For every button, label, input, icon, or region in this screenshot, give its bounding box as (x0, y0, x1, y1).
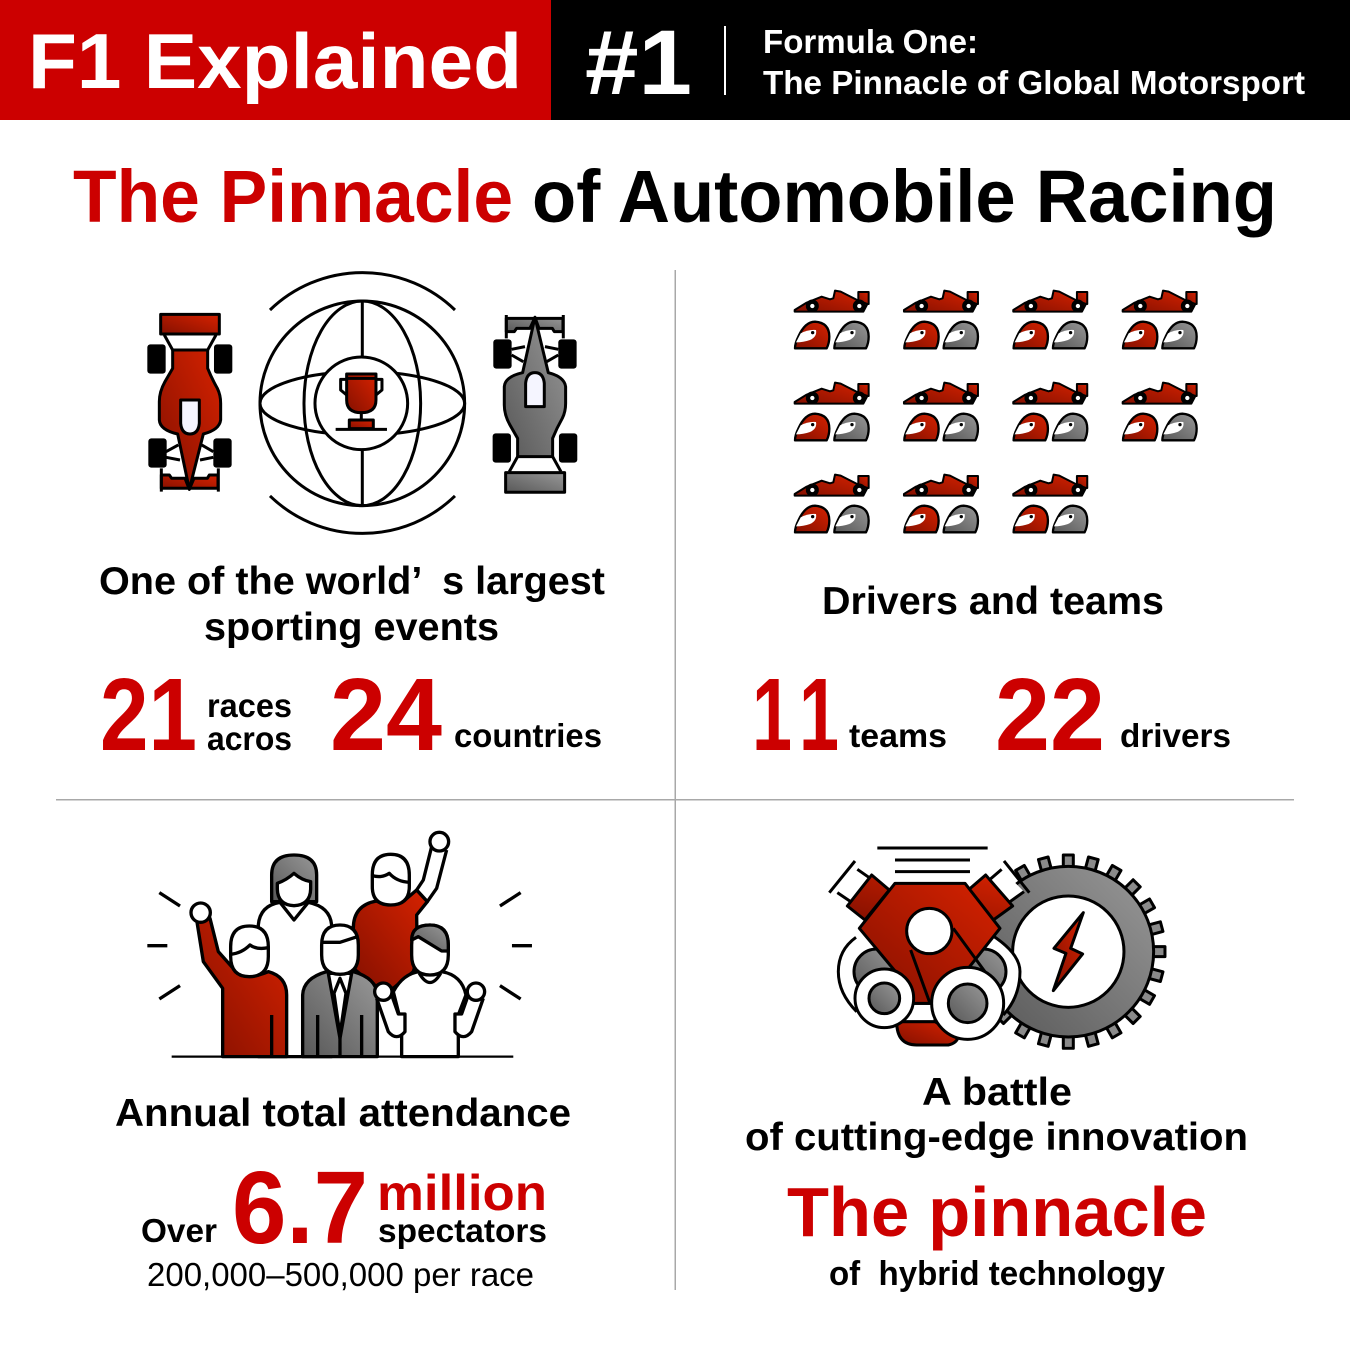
heading: annual total attendance: Annual total attendance (115, 1092, 571, 1135)
panel: drivers and teams (752, 291, 1231, 772)
stat: over 6.7 million spectators: spectators (378, 1212, 547, 1249)
stat: over 6.7 million spectators (141, 1150, 547, 1265)
icon: grey car top view (493, 315, 577, 492)
main title: The Pinnacle (73, 155, 513, 238)
heading: world's largest sporting events: sporting events (204, 606, 499, 649)
callout: of hybrid technology: of hybrid technology (829, 1255, 1165, 1293)
stat: 11 teams: 1 (752, 657, 792, 772)
stat: over 6.7 million spectators: 6.7 (232, 1150, 368, 1265)
stat: 24 countries: countries (454, 717, 602, 754)
stat: over 6.7 million spectators: Over (141, 1212, 217, 1249)
icon: engine and gear (829, 848, 1165, 1048)
stat: 22 drivers (995, 657, 1231, 772)
callout: the pinnacle: The pinnacle (787, 1173, 1207, 1251)
stat: over 6.7 million spectators: million (377, 1165, 547, 1221)
stat: 21 races across: acros (207, 720, 292, 757)
heading: drivers and teams: Drivers and teams (822, 580, 1164, 623)
header: red banner (0, 0, 551, 120)
icon grid: cars with two helmets per team (795, 291, 1197, 532)
heading: world's largest sporting events (99, 560, 605, 649)
heading: a battle of cutting-edge innovation (745, 1071, 1248, 1159)
heading: a battle of cutting-edge innovation: of cutting-edge innovation (745, 1116, 1248, 1159)
header title: F1 Explained (28, 17, 522, 105)
panel: attendance (115, 832, 571, 1293)
stat: 11 teams (752, 657, 947, 772)
header subtitle: Formula One: (763, 23, 978, 60)
stat: 22 drivers: drivers (1120, 717, 1231, 754)
icon: red car top view (147, 314, 232, 492)
heading: world's largest sporting events: One of the world’ s largest (99, 560, 605, 603)
icon: globe with trophy (260, 273, 465, 533)
stat: 11 teams: teams (849, 717, 947, 754)
header subtitle: The Pinnacle of Global Motorsport (763, 64, 1305, 101)
heading: a battle of cutting-edge innovation: A battle (922, 1071, 1072, 1114)
stat: 21 races across: races (207, 687, 292, 724)
header subtitle (763, 23, 1305, 101)
panel: hybrid technology (745, 848, 1248, 1293)
panel: largest sporting events (99, 273, 605, 772)
stat: 21 races across: 21 (100, 657, 197, 772)
header: black banner (551, 0, 1350, 120)
episode number: #1 (585, 12, 692, 114)
stat: 21 races across (100, 657, 292, 772)
main title: of Automobile Racing (532, 155, 1277, 238)
stat: 22 drivers: 22 (995, 657, 1105, 772)
stat: 11 teams: 1 (799, 657, 839, 772)
main title (73, 155, 1277, 238)
stat: 24 countries (330, 657, 602, 772)
lightning bolt (1053, 913, 1083, 991)
note: per race attendance: 200,000–500,000 per race (147, 1256, 534, 1293)
stat: 24 countries: 24 (330, 657, 442, 772)
icon: cheering crowd (147, 832, 532, 1057)
gear (972, 855, 1165, 1048)
